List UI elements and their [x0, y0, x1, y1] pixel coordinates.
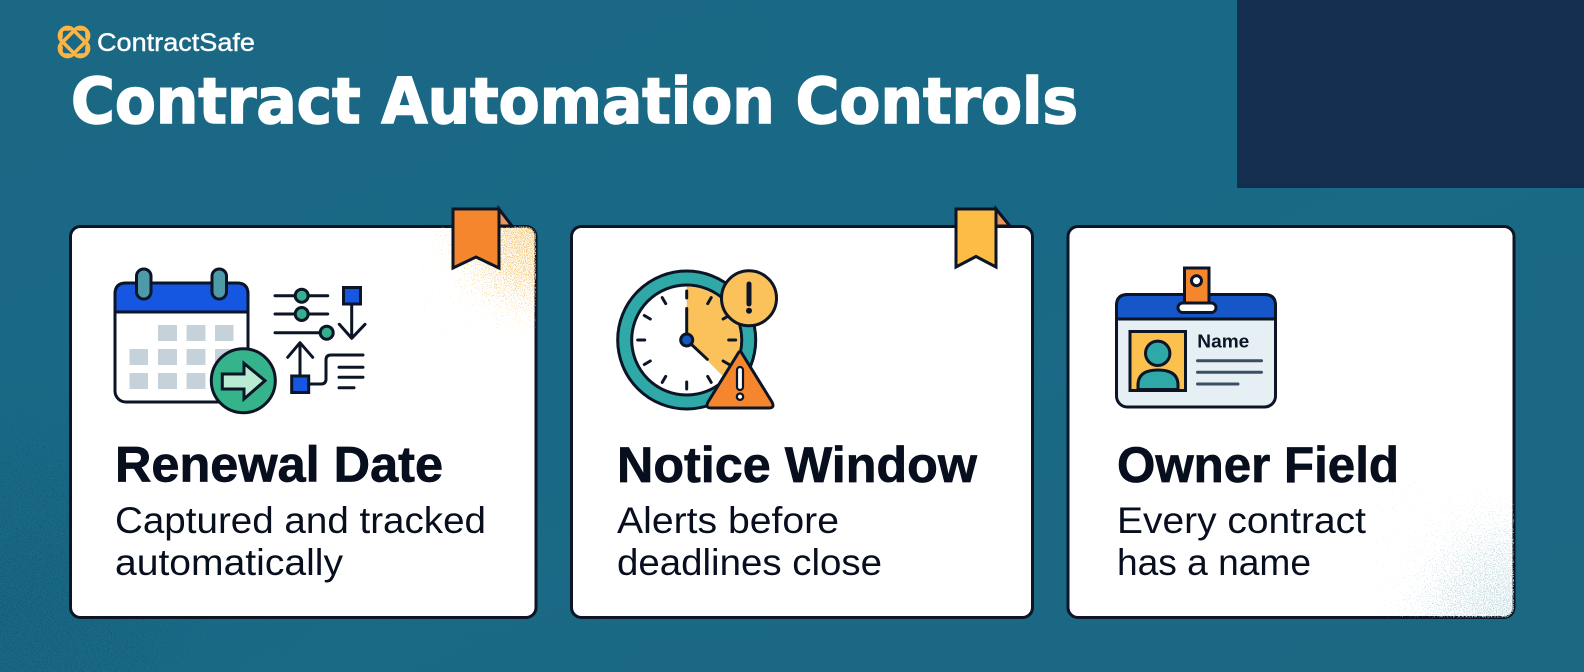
description	[617, 500, 882, 583]
alert circle	[722, 271, 776, 326]
dark corner block	[1237, 0, 1584, 188]
description: Captured and tracked	[115, 500, 486, 541]
speckled texture, bottom left	[0, 340, 300, 672]
panel: owner field	[1068, 226, 1520, 620]
corner texture	[1370, 480, 1520, 620]
card background	[572, 226, 1032, 618]
logo	[56, 24, 255, 60]
heading: Notice Window	[617, 437, 977, 493]
description: Every contract	[1117, 500, 1367, 541]
corner texture	[420, 226, 536, 340]
heading: Owner Field	[1117, 437, 1399, 493]
heading: Renewal Date	[115, 436, 443, 492]
panel: notice window	[572, 209, 1032, 618]
icon: calendar	[115, 269, 275, 413]
description	[115, 500, 486, 583]
warning triangle	[707, 352, 773, 408]
icon: id badge: Name	[1197, 332, 1249, 352]
bookmark ribbon	[956, 209, 1010, 267]
description: Alerts before	[617, 500, 839, 541]
title: Contract Automation Controls	[71, 65, 1078, 138]
icon: controls and flow	[275, 288, 365, 392]
description	[1117, 500, 1367, 583]
description: automatically	[115, 542, 344, 583]
icon: clock with alerts	[618, 271, 776, 409]
bookmark ribbon	[453, 209, 512, 268]
description: deadlines close	[617, 542, 882, 583]
logo wordmark: ContractSafe	[97, 29, 255, 57]
card background	[70, 226, 536, 618]
panel: renewal date	[70, 209, 545, 618]
card background	[1068, 226, 1514, 618]
logo icon	[56, 24, 92, 60]
icon: id badge	[1116, 268, 1276, 407]
description: has a name	[1117, 542, 1311, 583]
